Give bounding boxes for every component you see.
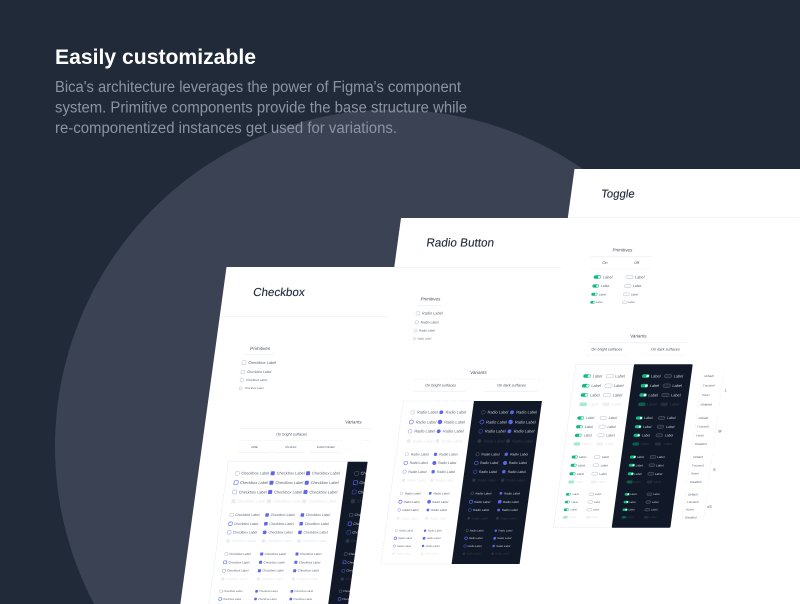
radio variant card: Radio Label <box>467 544 482 548</box>
toggle variant card: Label <box>651 508 658 512</box>
radio variant card: Radio Label <box>417 410 438 415</box>
radio variant card: Radio Label <box>431 508 448 512</box>
toggle size and state annotations: Focused <box>697 425 709 429</box>
toggle size and state annotations: Hover <box>701 393 710 397</box>
radio variant card: Radio Label <box>415 419 437 424</box>
radio primitives <box>412 296 445 341</box>
checkbox variant card: Checkbox Label <box>312 471 340 476</box>
toggle variant card: Label <box>582 442 591 446</box>
radio variant card: Radio Label <box>444 419 465 424</box>
checkbox variant card: Checkbox Label <box>360 471 389 476</box>
radio variant card: Radio Label <box>487 410 509 415</box>
toggle variant card <box>554 364 693 528</box>
radio variant card: Radio Label <box>436 479 454 482</box>
toggle variant card: Label <box>666 425 675 429</box>
toggle variant card: Label <box>630 492 637 496</box>
checkbox variant card: Checkbox Label <box>351 539 376 543</box>
radio primitives: Primitives <box>420 296 441 301</box>
radio variant card: Radio Label <box>396 552 411 556</box>
radio variants header: On dark surfaces <box>497 384 526 388</box>
heading: radio button: Radio Button <box>426 237 495 250</box>
checkbox variant card: Checkbox Label <box>227 569 249 573</box>
checkbox variant card: Checkbox Label <box>273 499 301 504</box>
toggle variant card: Label <box>637 455 645 459</box>
toggle variant card: Label <box>635 463 644 467</box>
checkbox variant card: Checkbox Label <box>264 552 287 556</box>
radio variant card: Radio Label <box>430 516 447 520</box>
radio variant card: Radio Label <box>473 508 490 512</box>
checkbox variant card: Checkbox Label <box>302 539 327 543</box>
checkbox variant card: Checkbox Label <box>296 577 319 581</box>
checkbox variant card: Checkbox Label <box>229 552 251 556</box>
checkbox variant card: Checkbox Label <box>297 569 320 573</box>
toggle size and state annotations: Disabled <box>685 515 697 519</box>
radio variant card: Radio Label <box>425 544 440 548</box>
radio variant card: Radio Label <box>405 491 421 495</box>
toggle variant card: Label <box>575 480 584 484</box>
toggle variant card: Label <box>647 402 657 407</box>
toggle variant card: Label <box>599 472 607 476</box>
radio variant card: Radio Label <box>438 461 457 465</box>
toggle variant card: Label <box>592 515 599 519</box>
toggle primitives: Label <box>599 292 607 296</box>
radio variant card: Radio Label <box>515 419 536 424</box>
radio variant card: Radio Label <box>481 453 500 456</box>
checkbox variant card: Checkbox Label <box>233 531 258 534</box>
radio variants header <box>413 370 541 391</box>
toggle size and state annotations: Disabled <box>700 402 713 406</box>
toggle size and state annotations: L <box>724 389 727 392</box>
checkbox variant card: Checkbox Label <box>303 531 328 534</box>
radio variant card: Radio Label <box>472 516 489 520</box>
toggle variant card: Label <box>592 373 603 378</box>
checkbox primitives: Checkbox Label <box>246 378 268 382</box>
radio variant card: Radio Label <box>495 552 510 556</box>
checkbox variant card: Checkbox Label <box>276 471 305 476</box>
toggle variant card: Label <box>600 463 609 467</box>
toggle variant card: Label <box>670 402 680 407</box>
radio variant card: Radio Label <box>502 508 518 512</box>
toggle variants header: On dark surfaces <box>651 347 680 351</box>
toggle primitives: Label <box>601 284 610 288</box>
checkbox variant card: Checkbox Label <box>241 471 270 476</box>
checkbox variants header: checked <box>285 445 297 449</box>
toggle variants header: On bright surfaces <box>591 347 623 351</box>
checkbox variant card: Checkbox Label <box>237 499 266 504</box>
description text: re-componentized instances get used for variations. <box>55 120 397 137</box>
radio variant card: Radio Label <box>399 529 414 533</box>
toggle size and state annotations: Default <box>698 416 708 420</box>
toggle variant card: Label <box>648 392 658 397</box>
checkbox variant card: Checkbox Label <box>226 577 248 581</box>
toggle variant card: Label <box>594 500 601 504</box>
toggle variant card: Label <box>595 492 602 496</box>
checkbox variant card: Checkbox Label <box>261 577 283 581</box>
toggle variant card: Label <box>569 515 577 519</box>
checkbox primitives: Checkbox Label <box>248 360 277 365</box>
toggle variant card: Label <box>649 383 660 388</box>
checkbox variant card: Checkbox Label <box>235 513 260 517</box>
toggle variant card: Label <box>590 392 600 397</box>
panel: radio button <box>348 218 631 604</box>
checkbox variant card: Checkbox Label <box>258 597 277 601</box>
toggle size and state annotations: Disabled <box>695 442 707 446</box>
radio variant card: Radio Label <box>466 552 481 556</box>
radio variant card: Radio Label <box>441 438 463 443</box>
toggle variant card: Label <box>667 416 676 420</box>
checkbox variant card: Checkbox Label <box>345 577 367 581</box>
toggle variant card: Label <box>628 508 635 512</box>
radio variant card: Radio Label <box>437 470 456 474</box>
toggle size and state annotations: Hover <box>691 472 699 476</box>
toggle size and state annotations: xS <box>707 505 712 509</box>
toggle size and state annotations: S <box>713 468 716 472</box>
toggle primitives: On <box>602 261 608 265</box>
radio variant card: Radio Label <box>507 470 526 474</box>
checkbox variant card: Checkbox Label <box>238 489 267 494</box>
toggle variant card: Label <box>586 416 595 420</box>
toggle variant card: Label <box>657 455 665 459</box>
radio variant card: Radio Label <box>401 516 418 520</box>
checkbox variant card: Checkbox Label <box>294 589 314 593</box>
toggle variant card: Label <box>665 434 674 437</box>
toggle primitives <box>584 247 653 304</box>
panel: checkbox <box>180 267 447 604</box>
toggle variant card: Label <box>615 373 625 378</box>
checkbox variant card: Checkbox Label <box>293 597 313 601</box>
toggle variant card: Label <box>642 434 651 437</box>
checkbox variant card: Checkbox Label <box>228 560 250 564</box>
radio variant card: Radio Label <box>439 453 458 456</box>
checkbox variant card: Checkbox Label <box>353 522 378 526</box>
toggle primitives: Label <box>628 300 635 304</box>
radio variant card: Radio Label <box>506 479 525 482</box>
checkbox variant card: Checkbox Label <box>223 589 243 593</box>
radio variant card: Radio Label <box>398 536 413 540</box>
radio primitives: Radio Label <box>422 311 443 316</box>
radio primitives: Radio Label <box>419 329 436 333</box>
checkbox variant card: Checkbox Label <box>269 522 294 526</box>
toggle variant card: Label <box>663 442 673 446</box>
checkbox variant card: Checkbox Label <box>274 489 303 494</box>
radio variant card: Radio Label <box>475 491 492 495</box>
checkbox variant card: Checkbox Label <box>267 539 292 543</box>
description text: Bica's architecture leverages the power of Figma's component <box>55 79 462 96</box>
checkbox variant card: Checkbox Label <box>309 489 338 494</box>
toggle primitives: Label <box>596 300 603 304</box>
radio variant card: Radio Label <box>510 453 529 456</box>
toggle primitives: Primitives <box>612 247 633 252</box>
checkbox primitives: Primitives <box>250 346 271 351</box>
checkbox variant card: Checkbox Label <box>342 597 361 601</box>
toggle variant card: Label <box>606 434 615 437</box>
checkbox variants header: On bright surfaces <box>276 433 307 437</box>
heading: toggle: Toggle <box>600 188 635 200</box>
checkbox variant card: Checkbox Label <box>308 499 337 504</box>
toggle variant card: Label <box>654 480 662 484</box>
checkbox variant card: Checkbox Label <box>348 552 371 556</box>
checkbox variant card: Checkbox Label <box>263 560 286 564</box>
toggle variant card: Label <box>612 392 623 397</box>
toggle variant card: Label <box>643 425 652 429</box>
radio variant card: Radio Label <box>424 552 439 556</box>
toggle variant card: Label <box>633 480 641 484</box>
checkbox variant card: Checkbox Label <box>346 569 368 573</box>
toggle variant card: Label <box>673 373 684 378</box>
radio primitives: Radio Label <box>420 321 439 324</box>
checkbox variant card <box>209 462 408 604</box>
radio variant card: Radio Label <box>470 529 484 533</box>
checkbox variants header <box>237 419 396 452</box>
toggle variant card: Label <box>607 425 616 429</box>
toggle size and state annotations: Default <box>688 492 698 496</box>
toggle variant card: Label <box>614 383 624 388</box>
toggle variants header: Variants <box>630 333 648 338</box>
radio variant card: Radio Label <box>397 544 412 548</box>
toggle size and state annotations: Hover <box>696 433 704 437</box>
radio variant card: Radio Label <box>479 470 498 474</box>
toggle primitives: Label <box>631 292 639 296</box>
radio variant card: Radio Label <box>409 461 428 465</box>
checkbox variant card: Checkbox Label <box>275 480 304 485</box>
checkbox variants header: initial <box>251 445 259 449</box>
radio variants header: On bright surfaces <box>425 384 456 388</box>
radio variant card: Radio Label <box>486 419 507 424</box>
checkbox variant card: Checkbox Label <box>259 589 278 593</box>
radio variants header: Variants <box>470 370 488 375</box>
radio variant card: Radio Label <box>414 429 436 434</box>
radio variant card: Radio Label <box>503 500 520 504</box>
heading: checkbox: Checkbox <box>252 286 306 299</box>
radio variant card: Radio Label <box>407 479 426 482</box>
checkbox variant card: Checkbox Label <box>304 522 330 526</box>
toggle variant card: Label <box>608 416 617 420</box>
radio variant card: Radio Label <box>413 438 434 443</box>
toggle variant card: Label <box>570 508 578 512</box>
radio variant card: Radio Label <box>403 500 420 504</box>
radio variant card: Radio Label <box>402 508 419 512</box>
radio variant card: Radio Label <box>478 479 496 482</box>
radio variant card: Radio Label <box>426 536 441 540</box>
checkbox variant card: Checkbox Label <box>358 489 387 494</box>
description text <box>55 79 467 137</box>
toggle variant card: Label <box>571 500 579 504</box>
radio variant card: Radio Label <box>474 500 491 504</box>
toggle size and state annotations: Disabled <box>690 480 702 484</box>
checkbox primitives: Checkbox Label <box>247 370 272 374</box>
checkbox variant card: Checkbox Label <box>240 480 268 485</box>
title: Easily customizable <box>55 46 256 69</box>
checkbox primitives: Checkbox Label <box>245 386 264 390</box>
toggle variant card: Label <box>601 455 610 459</box>
radio variant card <box>381 401 542 564</box>
toggle size and state annotations: Focused <box>687 500 699 504</box>
checkbox variant card: Checkbox Label <box>352 531 377 534</box>
toggle primitives: Label <box>633 284 642 288</box>
radio variant card: Radio Label <box>433 491 450 495</box>
checkbox variant card: Checkbox Label <box>354 513 379 517</box>
radio variant card: Radio Label <box>500 516 517 520</box>
toggle variant card: Label <box>652 500 659 504</box>
radio variant card: Radio Label <box>468 536 483 540</box>
checkbox variant card: Checkbox Label <box>262 569 284 573</box>
radio variant card: Radio Label <box>445 410 467 415</box>
radio variant card: Radio Label <box>483 438 505 443</box>
checkbox variant card: Checkbox Label <box>343 589 362 593</box>
toggle variant card: Label <box>584 425 594 429</box>
toggle variant card: Label <box>605 442 614 446</box>
radio variant card: Radio Label <box>512 438 534 443</box>
toggle variant card: Label <box>651 373 661 378</box>
checkbox variant card: Checkbox Label <box>270 513 295 517</box>
toggle variant card: Label <box>578 463 586 467</box>
radio variant card: Radio Label <box>516 410 538 415</box>
toggle primitives: Label <box>635 274 645 279</box>
checkbox variant card: Checkbox Label <box>347 560 370 564</box>
checkbox variant card: Checkbox Label <box>222 597 242 601</box>
checkbox primitives <box>238 346 279 390</box>
checkbox variant card: Checkbox Label <box>357 499 385 504</box>
toggle size and state annotations: Focused <box>703 384 715 388</box>
toggle variant card: Label <box>591 383 601 388</box>
checkbox variant card: Checkbox Label <box>234 522 259 526</box>
radio variant card: Radio Label <box>411 453 429 456</box>
panel: toggle <box>515 169 800 604</box>
toggle variant card: Label <box>572 492 580 496</box>
toggle variant card: Label <box>629 500 636 504</box>
background circle <box>55 110 729 604</box>
checkbox variant card: Checkbox Label <box>268 531 293 534</box>
radio variant card: Radio Label <box>408 470 427 474</box>
toggle size and state annotations: Focused <box>692 463 704 467</box>
toggle primitives: Label <box>603 274 613 279</box>
toggle variant card: Label <box>593 508 600 512</box>
toggle variant card: Label <box>656 463 664 467</box>
radio variant card: Radio Label <box>432 500 449 504</box>
toggle variant card: Label <box>671 392 681 397</box>
toggle variant card: Label <box>611 402 621 407</box>
checkbox variants header: Variants <box>345 419 363 424</box>
checkbox variant card: Checkbox Label <box>310 480 339 485</box>
radio variant card: Radio Label <box>513 429 535 434</box>
toggle variant card: Label <box>644 416 653 420</box>
toggle size and state annotations: M <box>718 430 722 433</box>
checkbox variants header: indeterminate <box>317 445 336 449</box>
radio primitives: Radio Label <box>417 337 432 341</box>
toggle variants header <box>586 333 689 355</box>
toggle variant card: Label <box>650 515 657 519</box>
toggle size and state annotations: Default <box>693 455 703 459</box>
radio variant card: Radio Label <box>480 461 499 465</box>
toggle variant card: Label <box>579 455 587 459</box>
radio variant card: Radio Label <box>509 461 528 465</box>
toggle variant card: Label <box>589 402 599 407</box>
checkbox variant card: Checkbox Label <box>359 480 388 485</box>
radio variant card: Radio Label <box>498 529 513 533</box>
toggle variant card: Label <box>640 442 650 446</box>
toggle variant card: Label <box>672 383 682 388</box>
toggle size and state annotations: Default <box>704 374 714 378</box>
toggle variant card: Label <box>655 472 663 476</box>
toggle primitives: Off <box>634 261 640 265</box>
checkbox variant card: Checkbox Label <box>300 552 322 556</box>
toggle variant card: Label <box>653 492 660 496</box>
toggle variant card: Label <box>576 472 585 476</box>
toggle variant card: Label <box>627 515 634 519</box>
checkbox variant card: Checkbox Label <box>306 513 331 517</box>
radio variant card: Radio Label <box>496 544 511 548</box>
radio variant card: Radio Label <box>428 529 442 533</box>
toggle size and state annotations <box>682 373 730 520</box>
toggle variant card: Label <box>634 472 642 476</box>
radio variant card: Radio Label <box>485 429 506 434</box>
description text: system. Primitive components provide the base structure while <box>55 100 467 116</box>
radio variant card: Radio Label <box>504 491 521 495</box>
checkbox variant card: Checkbox Label <box>299 560 321 564</box>
toggle variant card: Label <box>598 480 606 484</box>
checkbox variant card: Checkbox Label <box>231 539 256 543</box>
toggle size and state annotations: Hover <box>686 508 694 512</box>
radio variant card: Radio Label <box>497 536 512 540</box>
radio variant card: Radio Label <box>443 429 464 434</box>
toggle variant card: Label <box>583 434 592 437</box>
